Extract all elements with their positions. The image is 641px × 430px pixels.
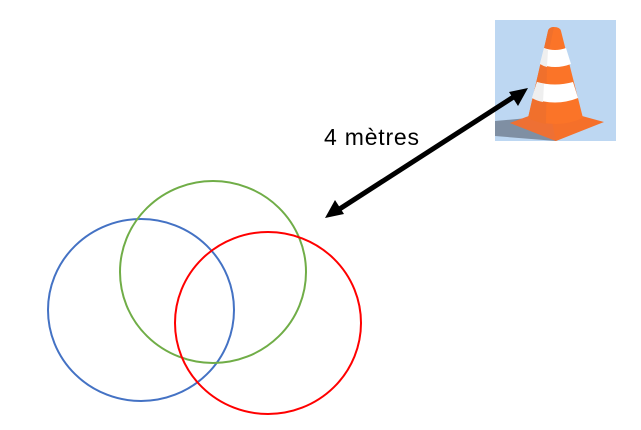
circle: blue [48, 219, 234, 401]
label: distance: 4 mètres [324, 124, 419, 150]
arrow: double-headed distance [325, 88, 528, 218]
circle: red [175, 232, 361, 414]
circle: green [120, 181, 306, 363]
icon: traffic cone [495, 20, 616, 141]
